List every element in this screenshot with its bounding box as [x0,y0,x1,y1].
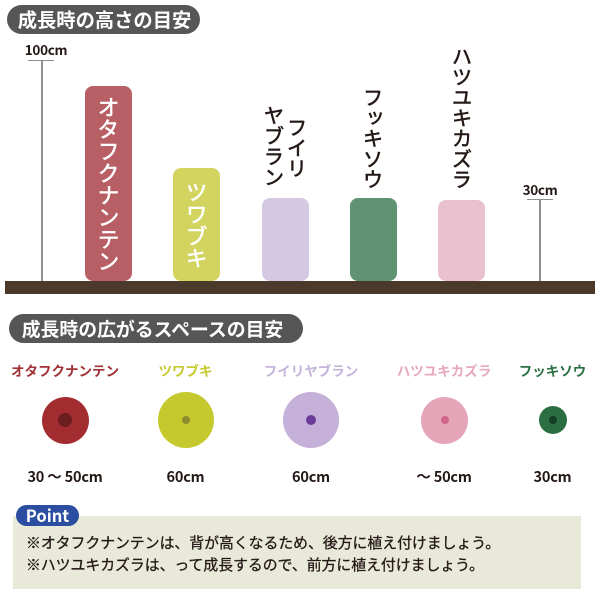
spread circle [421,396,468,444]
size: 30 〜 50cm [27,466,103,487]
plant: hatsuyukikazura [397,360,491,487]
heading: height: 成長時の高さの目安 [18,5,191,33]
panel: point [13,516,581,589]
axis: 30cm [539,199,541,282]
center dot [306,415,316,425]
plant: fukisou [519,360,586,487]
size: 60cm [292,466,330,487]
ground [5,281,595,294]
spread circle [283,392,339,448]
center dot [548,416,556,424]
badge: point [16,505,79,526]
point text line 2: ※ハツユキカズラは、って成長するので、前方に植え付けましょう。 [26,554,484,575]
bar: fuiriyaburan [262,198,308,281]
spread circle [158,392,214,448]
name: fuiriyaburan line 2: ヤブラン [259,105,289,187]
panel: height chart [5,39,595,294]
spread circle [538,406,566,434]
name: fukisou: フッキソウ [358,87,388,190]
name: hatsuyukikazura: ハツユキカズラ [447,46,477,190]
center dot [182,416,190,424]
center dot [58,413,72,427]
label: 100cm: 100cm [25,39,67,59]
size: 〜 50cm [416,466,472,487]
plant: fuiriyaburan [264,360,358,487]
plant: tsuwabuki [158,360,214,487]
point text line 1: ※オタフクナンテンは、背が高くなるため、後方に植え付けましょう。 [26,532,500,553]
spread circle [42,396,88,444]
heading: spread: 成長時の広がるスペースの目安 [22,315,283,342]
bar: fukisou [350,198,396,281]
tick: 30cm [526,198,552,200]
badge: point: Point [26,503,69,527]
tick: 100cm [28,60,54,61]
label: 30cm: 30cm [523,179,557,199]
name: フッキソウ [519,360,586,380]
bar label: ツワブキ [180,181,212,269]
bar label: オタフクナンテン [92,96,124,272]
name: ツワブキ [158,360,212,380]
name: ハツユキカズラ [397,360,491,380]
bar: otafukunanten [85,86,132,281]
bar: tsuwabuki [173,168,220,281]
bar: hatsuyukikazura [438,200,484,281]
name: オタフクナンテン [11,360,119,380]
name: fuiriyaburan line 1: フイリ [282,117,312,178]
size: 30cm [534,466,571,487]
plant: otafukunanten [11,360,119,487]
axis: 100cm [41,60,43,282]
size: 60cm [167,466,204,487]
center dot [440,416,448,424]
name: フイリヤブラン [264,360,358,380]
